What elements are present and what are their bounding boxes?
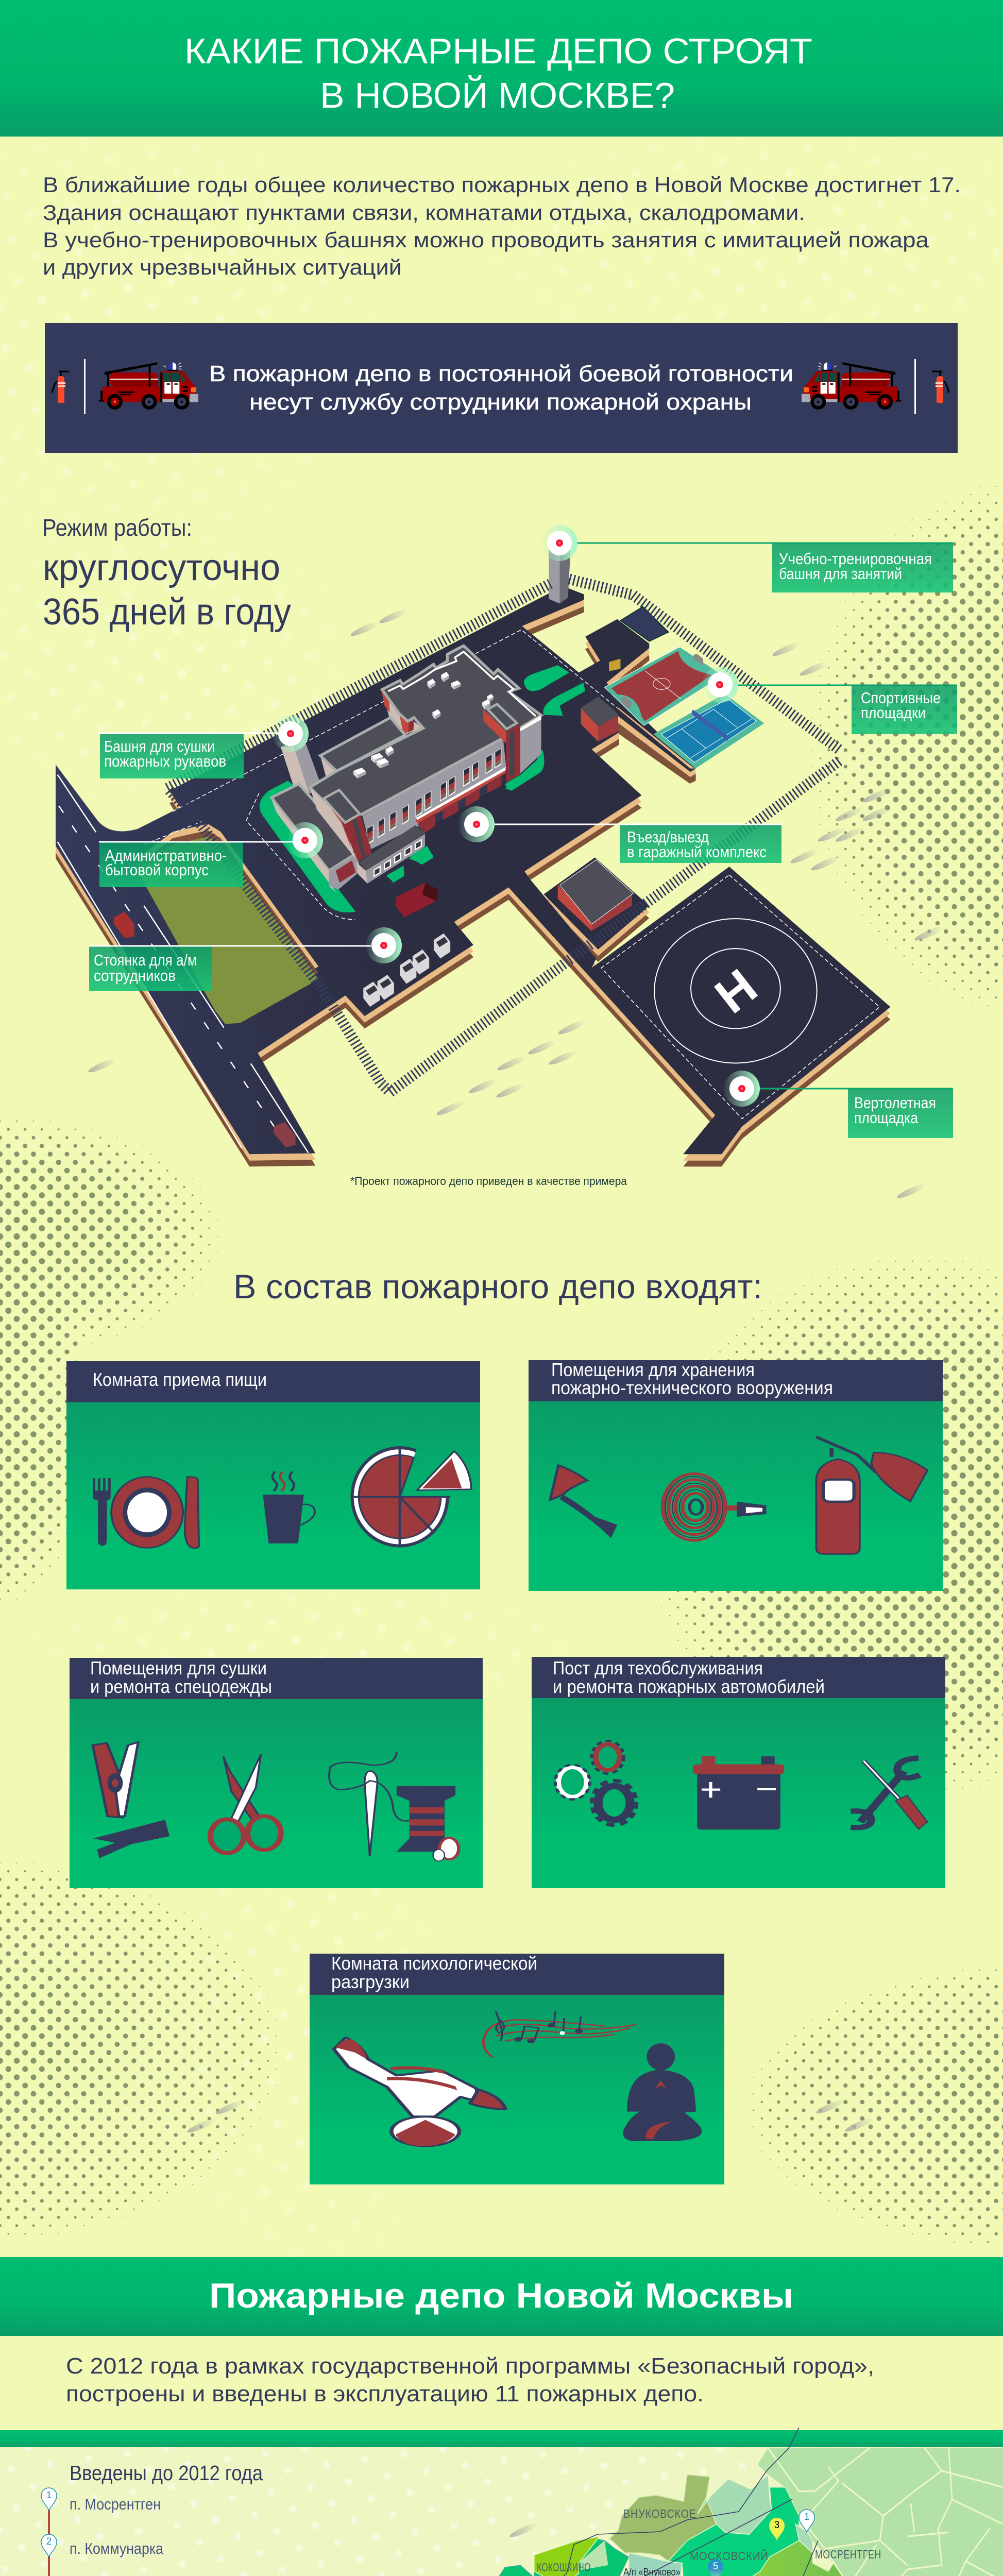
callout: helipad xyxy=(724,1071,953,1138)
greenery xyxy=(260,665,585,912)
map region: Филимонковское xyxy=(613,2553,760,2576)
callout: hose tower: Башня для сушки xyxy=(104,737,215,755)
intro text: В ближайшие годы общее количество пожарных депо в Новой Москве достигнет 17. xyxy=(43,173,961,197)
tennis court xyxy=(653,694,764,769)
panel: equipment storage: пожарно-технического вооружения xyxy=(551,1377,833,1398)
section header: depots xyxy=(0,2257,1003,2336)
callout: parking: Стоянка для а/м xyxy=(94,951,197,969)
panel: clothes drying and repair: Помещения для сушки xyxy=(90,1657,267,1679)
map pins: built after 2012 xyxy=(308,2559,906,2576)
icon: plate xyxy=(111,1477,183,1548)
list pins before 2012: 1 xyxy=(46,2490,52,2501)
work schedule xyxy=(42,514,291,633)
callout: sports grounds: Спортивные xyxy=(861,689,941,707)
panel: equipment storage: Помещения для хранения xyxy=(551,1359,755,1380)
slabs extrusion xyxy=(56,592,890,1166)
banner text: В пожарном депо в постоянной боевой готовности xyxy=(209,361,793,386)
icon: knife xyxy=(185,1477,199,1548)
divider right xyxy=(914,359,916,414)
icon: extinguisher xyxy=(816,1437,927,1554)
icon: needle and thread xyxy=(329,1752,458,1861)
work schedule: круглосуточно xyxy=(43,547,280,588)
icon: extinguisher left xyxy=(52,371,69,403)
map pins: construction 2023-2024 xyxy=(568,2518,785,2576)
hose tower column xyxy=(281,738,323,797)
title header xyxy=(0,0,1003,137)
callout: admin building xyxy=(99,822,323,887)
admin block lower xyxy=(271,784,359,893)
callout: helipad: Вертолетная xyxy=(854,1094,936,1112)
roof equipment xyxy=(353,672,494,778)
asphalt xyxy=(56,586,890,1154)
icon: fire truck right xyxy=(802,362,901,410)
map pins: built after 2012: 5 xyxy=(713,2561,718,2572)
icon: nozzle xyxy=(723,1502,767,1517)
depot isometric plan xyxy=(56,525,957,1166)
panel: relaxation room: разгрузки xyxy=(331,1971,410,1992)
awning and garage doors xyxy=(416,767,506,833)
roof lower wing xyxy=(320,718,405,771)
map section background xyxy=(0,2442,1003,2576)
main roof xyxy=(310,646,541,823)
title line 2: В НОВОЙ МОСКВЕ? xyxy=(320,75,675,115)
Moscow city districts xyxy=(758,2448,1003,2576)
map region: Мосрентген xyxy=(795,2524,831,2571)
intro text xyxy=(43,173,961,279)
road markings xyxy=(58,630,879,1153)
front extension xyxy=(356,825,425,884)
callout: entrance xyxy=(458,806,781,863)
callout: helipad: площадка xyxy=(854,1109,919,1127)
icon: massage chair xyxy=(334,2038,505,2146)
intro text: и других чрезвычайных ситуаций xyxy=(43,255,402,279)
courtyard wall xyxy=(320,689,422,778)
intro text: Здания оснащают пунктами связи, комнатами отдыха, скалодромами. xyxy=(43,200,805,225)
panel: relaxation room: Комната психологической xyxy=(331,1953,537,1974)
list items before 2012: п. Коммунарка xyxy=(70,2539,164,2557)
map region: Кокошкино xyxy=(534,2536,600,2576)
garage building xyxy=(558,860,633,931)
work schedule: Режим работы: xyxy=(42,514,192,541)
icon: axe xyxy=(550,1465,617,1538)
H helipad marker: H xyxy=(705,959,767,1024)
right side wall xyxy=(520,717,541,774)
list pins before 2012 xyxy=(41,2488,57,2576)
map region: Кокошкино pale part xyxy=(581,2540,608,2570)
panel: relaxation room xyxy=(310,1953,724,2184)
icon: clothespin lying xyxy=(93,1820,169,1858)
icons: plate, mug, pizza xyxy=(93,1446,471,1548)
list items before 2012: п. Мосрентген xyxy=(70,2495,161,2513)
green patches near building xyxy=(386,752,543,882)
icon: fork xyxy=(93,1478,111,1546)
stair tower left xyxy=(310,787,372,861)
list: built before 2012 xyxy=(41,2461,263,2576)
callout: hose tower: пожарных рукавов xyxy=(104,752,226,770)
divider left xyxy=(84,359,86,414)
training tower xyxy=(549,549,571,603)
list pins before 2012: 2 xyxy=(46,2536,52,2547)
panel: equipment storage xyxy=(529,1359,943,1591)
utility block xyxy=(581,607,669,741)
map labels: ВНУКОВСКОЕ xyxy=(623,2507,696,2520)
map labels xyxy=(307,2507,942,2576)
lawn island xyxy=(138,824,318,1024)
icon: extinguisher right xyxy=(932,371,949,403)
parked cars and vehicles xyxy=(114,883,438,1147)
helipad markings xyxy=(654,919,817,1063)
football court xyxy=(604,647,721,725)
sports courts xyxy=(604,647,764,784)
callout: training tower: Учебно-тренировочная xyxy=(779,550,932,568)
icon: battery xyxy=(693,1756,784,1829)
callout: parking: сотрудников xyxy=(94,967,176,985)
heading: composition: В состав пожарного депо входят: xyxy=(233,1267,762,1306)
title line 1: КАКИЕ ПОЖАРНЫЕ ДЕПО СТРОЯТ xyxy=(184,31,812,71)
icon: gears xyxy=(555,1741,636,1825)
callout: parking xyxy=(89,927,402,991)
railways and highways xyxy=(269,2428,931,2576)
map pins: built before 2012 xyxy=(373,2510,943,2576)
map labels: МОСКОВСКИЙ xyxy=(690,2549,769,2563)
callout: sports grounds: площадки xyxy=(861,704,926,722)
icon: meditating person xyxy=(623,2043,702,2141)
icon: screwdriver xyxy=(863,1761,927,1829)
panel: vehicle maintenance xyxy=(532,1657,945,1888)
map labels: МОСРЕНТГЕН xyxy=(815,2548,881,2561)
map pins: construction 2023-2024: 3 xyxy=(774,2520,779,2531)
front wall xyxy=(362,738,506,849)
panel: dining room xyxy=(66,1361,480,1589)
map region: Сосенское xyxy=(734,2540,894,2576)
footnote: *Проект пожарного депо приведен в качестве примера xyxy=(350,1175,627,1188)
stair tower right xyxy=(483,704,520,782)
section intro text: С 2012 года в рамках государственной программы «Безопасный город», xyxy=(66,2353,874,2379)
panel: dining room: Комната приема пищи xyxy=(93,1369,267,1390)
left timeline line xyxy=(48,2499,50,2576)
panel: clothes drying and repair: и ремонта спецодежды xyxy=(90,1676,272,1697)
map of New Moscow xyxy=(249,2428,1003,2576)
map pins: built before 2012: 1 xyxy=(804,2512,809,2522)
panel: vehicle maintenance: и ремонта пожарных автомобилей xyxy=(553,1676,825,1697)
map region: north strip xyxy=(698,2475,772,2534)
list: built before 2012: Введены до 2012 года xyxy=(70,2461,263,2485)
icon: clothespin upright xyxy=(93,1742,138,1818)
windows row xyxy=(367,748,501,845)
work schedule: 365 дней в году xyxy=(43,591,291,633)
map region: Марушкинское xyxy=(493,2538,644,2576)
icon: wrench xyxy=(851,1758,920,1827)
icon: airplane Vnukovo xyxy=(624,2571,658,2576)
fire station main building xyxy=(271,646,543,893)
panel: clothes drying and repair xyxy=(70,1657,483,1888)
callout: sports grounds xyxy=(702,667,957,734)
callout: admin building: Административно- xyxy=(105,846,227,865)
icon: scissors xyxy=(211,1754,281,1853)
callout: training tower xyxy=(541,525,953,592)
callout: admin building: бытовой корпус xyxy=(105,861,209,879)
white parapet highlights xyxy=(388,652,536,716)
section header: depots: Пожарные депо Новой Москвы xyxy=(209,2276,793,2315)
icon: fire truck left xyxy=(99,362,198,410)
map labels: КОКОШКИНО xyxy=(537,2561,591,2574)
intro text: В учебно-тренировочных башнях можно проводить занятия с имитацией пожара xyxy=(43,228,929,252)
perimeter fence xyxy=(167,579,839,1092)
section intro text xyxy=(66,2353,874,2406)
callout: entrance: Въезд/выезд xyxy=(627,828,709,846)
green bar above map xyxy=(0,2430,1003,2447)
map region: Московский xyxy=(668,2487,799,2576)
banner text xyxy=(209,361,793,415)
icon: pizza xyxy=(350,1446,471,1547)
map region: Внуковское xyxy=(610,2475,717,2561)
section intro text: построены и введены в эксплуатацию 11 пожарных депо. xyxy=(66,2381,704,2406)
icon: music notes xyxy=(483,2011,636,2057)
icon: mug xyxy=(263,1471,315,1544)
banner: duty xyxy=(45,323,958,453)
icon: hose xyxy=(662,1474,725,1540)
banner text: несут службу сотрудники пожарной охраны xyxy=(249,389,752,415)
callout: training tower: башня для занятий xyxy=(779,565,902,583)
callout: hose tower xyxy=(98,716,309,778)
list items before 2012 xyxy=(70,2495,206,2576)
panel: vehicle maintenance: Пост для техобслуживания xyxy=(553,1657,763,1679)
callout: entrance: в гаражный комплекс xyxy=(627,843,767,861)
